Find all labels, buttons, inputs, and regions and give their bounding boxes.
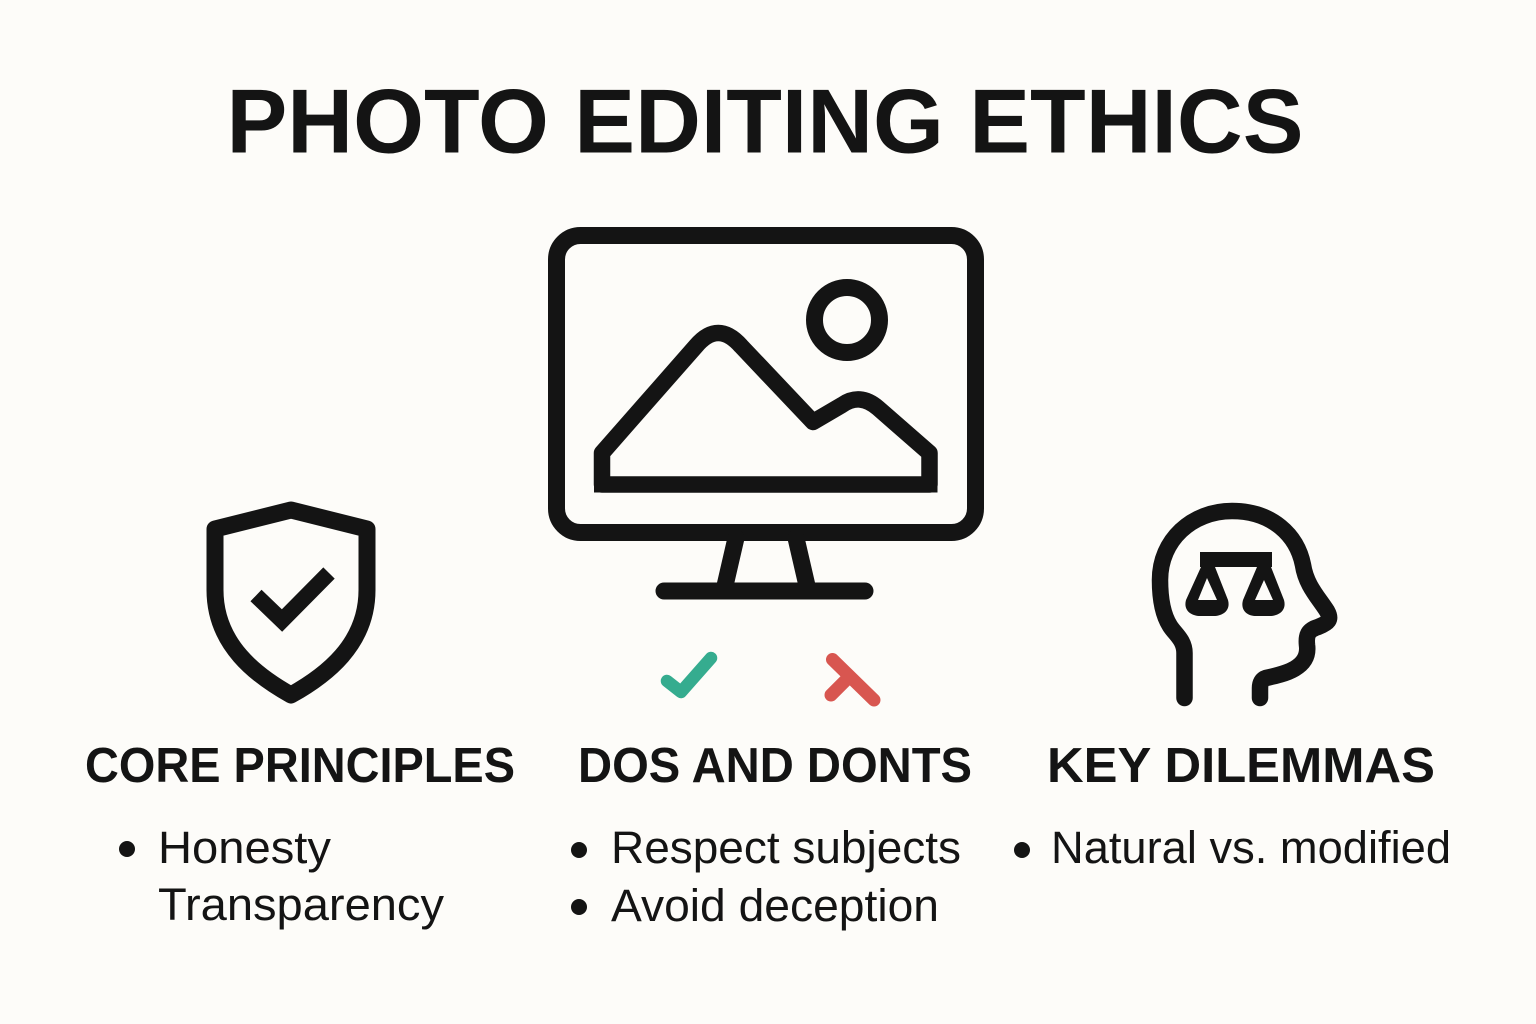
sun: [814, 288, 880, 352]
icon: monitor with landscape photo: [556, 236, 976, 591]
head outline: [1160, 511, 1329, 698]
monitor stand legs: [724, 538, 808, 590]
bullet list: dos and donts: [571, 822, 961, 931]
panel: key dilemmas: [1014, 511, 1451, 873]
bullet list: core principles: [119, 822, 445, 930]
bullet list: core principles: Honesty: [158, 822, 332, 873]
bullet list: dos and donts: Avoid deception: [611, 880, 939, 931]
monitor screen: [556, 236, 976, 532]
mountain base corners: [594, 482, 938, 492]
icon: green check: [667, 658, 711, 692]
panel: dos and donts: [571, 739, 972, 931]
scales of justice: [1185, 552, 1285, 616]
mountains: [602, 333, 930, 484]
bullet list: key dilemmas: Natural vs. modified: [1051, 822, 1451, 873]
heading: dos and donts: DOS AND DONTS: [578, 739, 972, 793]
heading: core principles: CORE PRINCIPLES: [85, 739, 515, 793]
title: PHOTO EDITING ETHICS: [226, 72, 1304, 172]
shield outline: [215, 510, 367, 695]
monitor stand base: [664, 582, 865, 600]
bullet list: core principles: Transparency: [158, 879, 445, 930]
icon: shield with check: [215, 510, 367, 695]
icon: head with scales: [1160, 511, 1329, 698]
panel: core principles: [85, 510, 515, 930]
shield check mark: [256, 573, 329, 620]
bullet list: dos and donts: Respect subjects: [611, 822, 961, 873]
heading: key dilemmas: KEY DILEMMAS: [1047, 739, 1435, 793]
icon: red cross mark: [831, 660, 874, 700]
